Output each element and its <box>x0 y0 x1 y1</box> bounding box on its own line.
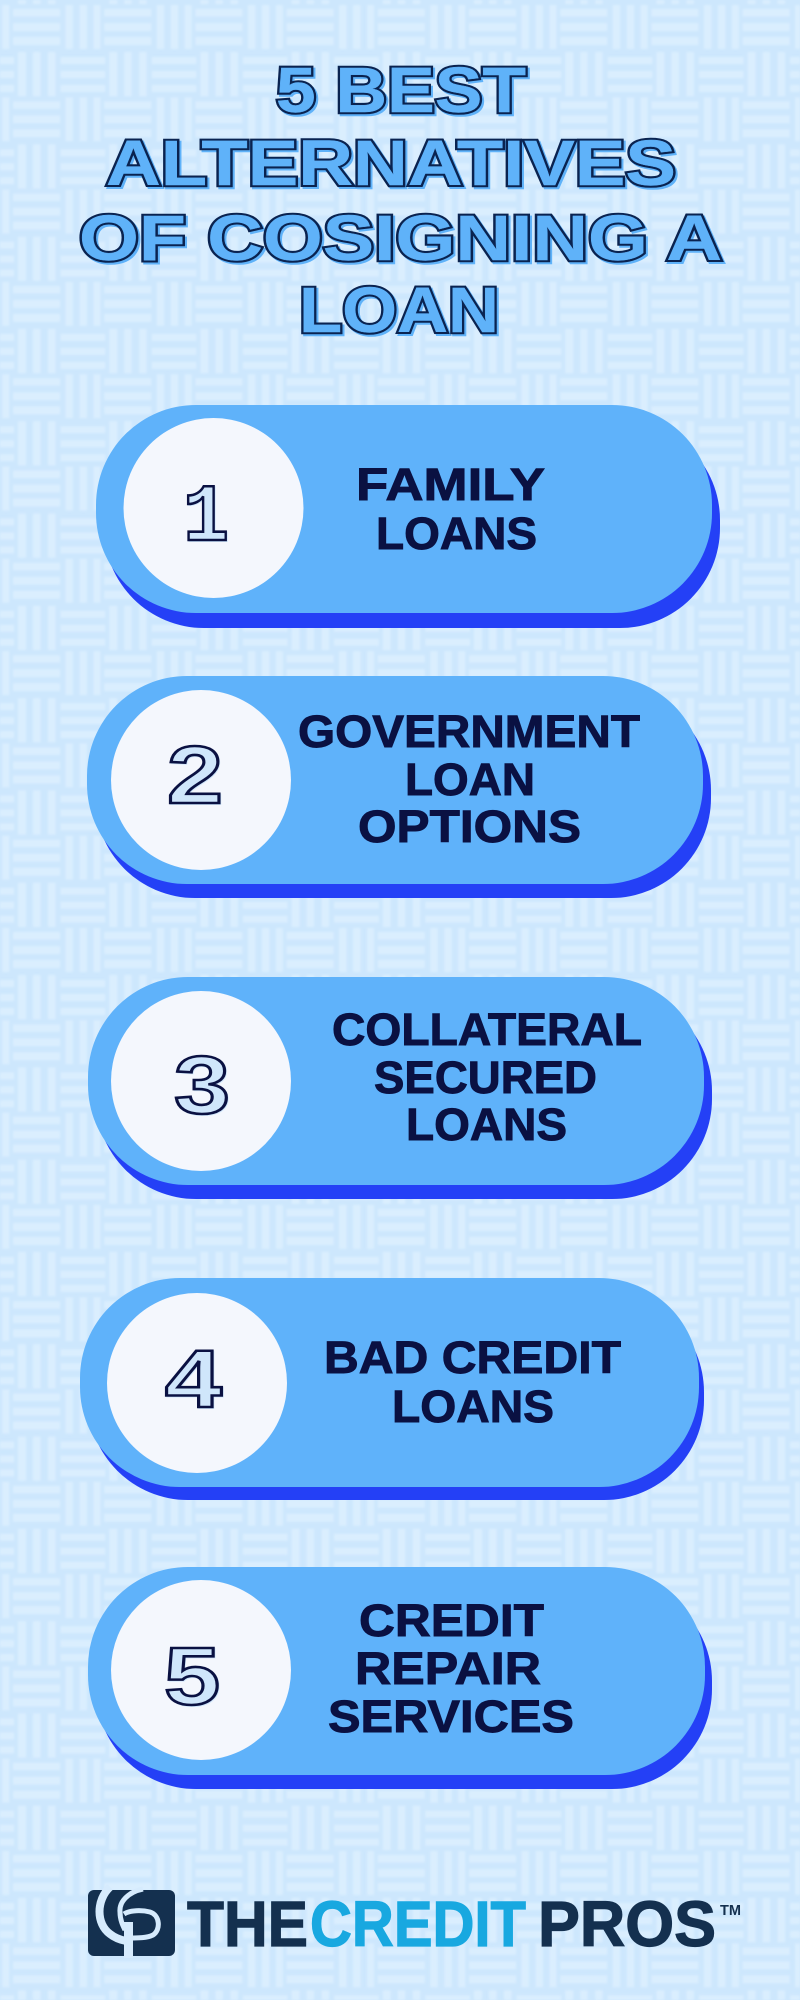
title: LOAN <box>301 276 501 348</box>
label: credit repair services <box>328 1595 574 1742</box>
label: government loan options: OPTIONS <box>358 801 581 852</box>
label: credit repair services: REPAIR <box>355 1643 541 1694</box>
number badge 5: 5 <box>165 1632 221 1723</box>
wordmark: PROS <box>538 1888 716 1960</box>
label: credit repair services: SERVICES <box>328 1691 574 1742</box>
label: family loans: LOANS <box>376 508 537 559</box>
title: ALTERNATIVES <box>106 127 676 199</box>
title <box>79 54 724 348</box>
label: credit repair services: CREDIT <box>359 1595 544 1646</box>
number badge 3 <box>111 991 291 1171</box>
label: government loan options: LOAN <box>405 754 535 805</box>
number badge 4: 4 <box>165 1334 222 1425</box>
number badge 3: 3 <box>175 1041 231 1132</box>
title: OF COSIGNING A <box>81 204 724 276</box>
title: 5 BEST <box>278 56 528 128</box>
number badge 1 <box>124 418 304 598</box>
label: bad credit loans: LOANS <box>392 1381 554 1432</box>
number badge 2: 2 <box>168 731 224 822</box>
title: ALTERNATIVES <box>108 129 678 201</box>
wordmark <box>187 1888 741 1960</box>
title: OF COSIGNING A <box>79 202 722 274</box>
label: collateral secured loans: LOANS <box>406 1099 567 1150</box>
label: family loans: FAMILY <box>356 459 545 510</box>
title: OF COSIGNING A <box>79 202 722 274</box>
label: family loans <box>356 459 545 559</box>
panel: item 3 collateral secured loans <box>88 977 712 1199</box>
label: collateral secured loans <box>332 1004 642 1150</box>
panel: item 1 family loans <box>96 405 720 628</box>
number badge 5: 5 <box>164 1631 220 1722</box>
label: government loan options: GOVERNMENT <box>298 706 640 757</box>
wordmark: CREDIT <box>310 1888 526 1960</box>
logo: the credit pros <box>88 1887 741 1960</box>
label: bad credit loans <box>324 1332 621 1432</box>
icon: logo mark <box>88 1887 175 1958</box>
number badge 2 <box>111 690 291 870</box>
number badge 4 <box>107 1293 287 1473</box>
title: 5 BEST <box>276 54 526 126</box>
label: government loan options <box>298 706 640 852</box>
title: LOAN <box>299 274 499 346</box>
label: collateral secured loans: COLLATERAL <box>332 1004 642 1055</box>
number badge 5 <box>111 1580 291 1760</box>
label: collateral secured loans: SECURED <box>374 1052 597 1103</box>
number badge 1: 1 <box>183 472 229 565</box>
label: bad credit loans: BAD CREDIT <box>324 1332 621 1383</box>
panel: item 2 government loan options <box>87 676 711 898</box>
wordmark: THE <box>187 1888 308 1960</box>
title: LOAN <box>299 274 499 346</box>
title: 5 BEST <box>276 54 526 126</box>
number badge 4: 4 <box>166 1335 223 1426</box>
number badge 2: 2 <box>167 730 223 821</box>
number badge 1: 1 <box>184 473 230 566</box>
panel: item 5 credit repair services <box>88 1567 712 1789</box>
wordmark: TM <box>720 1902 741 1919</box>
title: ALTERNATIVES <box>106 127 676 199</box>
number badge 3: 3 <box>174 1040 230 1131</box>
panel: item 4 bad credit loans <box>80 1278 704 1500</box>
